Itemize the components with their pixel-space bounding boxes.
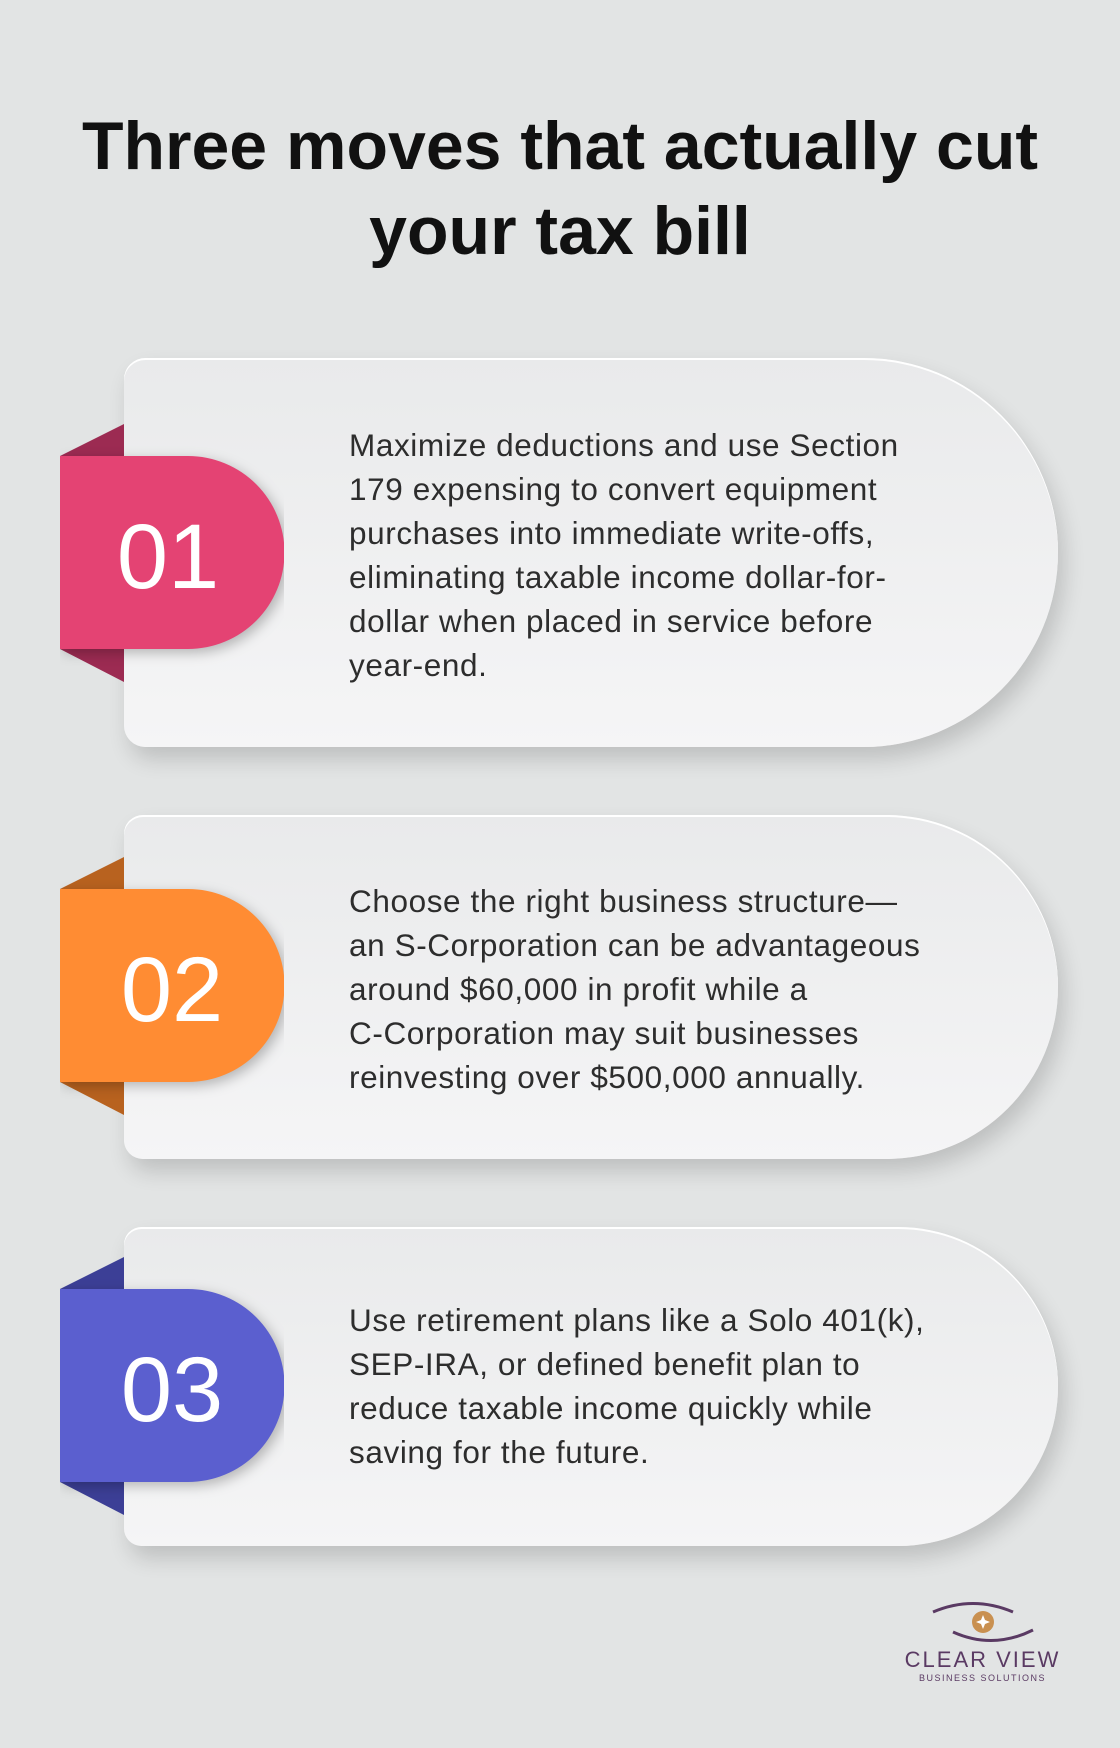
tab 03 [60,1257,284,1515]
title: your tax bill [369,193,751,269]
tab 01 [60,424,284,682]
text 3: saving for the future. [349,1434,649,1470]
text 1 [349,427,899,683]
logo [905,1602,1060,1683]
logo: BUSINESS SOLUTIONS [919,1673,1046,1683]
text 2 [349,883,920,1095]
text 1: 179 expensing to convert equipment [349,471,877,507]
icon: eye [932,1602,1034,1642]
logo: CLEAR VIEW [905,1647,1060,1672]
tab 02 [60,857,284,1115]
text 3: Use retirement plans like a Solo 401(k), [349,1302,924,1338]
text 1: eliminating taxable income dollar-for- [349,559,887,595]
title [82,108,1038,269]
title: Three moves that actually cut [82,108,1038,184]
text 2: an S-Corporation can be advantageous [349,927,920,963]
tab 01: 01 [117,506,219,608]
tab 02: 02 [121,939,223,1041]
text 2: Choose the right business structure— [349,883,898,919]
text 2: reinvesting over $500,000 annually. [349,1059,865,1095]
tab 03: 03 [121,1339,223,1441]
text 1: year-end. [349,647,487,683]
text 3: reduce taxable income quickly while [349,1390,873,1426]
text 1: purchases into immediate write-offs, [349,515,874,551]
panel: card 3 [124,1227,1058,1546]
text 3 [349,1302,924,1470]
text 2: around $60,000 in profit while a [349,971,808,1007]
panel: card 2 [124,815,1058,1159]
text 3: SEP-IRA, or defined benefit plan to [349,1346,860,1382]
text 2: C-Corporation may suit businesses [349,1015,859,1051]
text 1: Maximize deductions and use Section [349,427,899,463]
text 1: dollar when placed in service before [349,603,873,639]
panel: card 1 [124,358,1058,747]
